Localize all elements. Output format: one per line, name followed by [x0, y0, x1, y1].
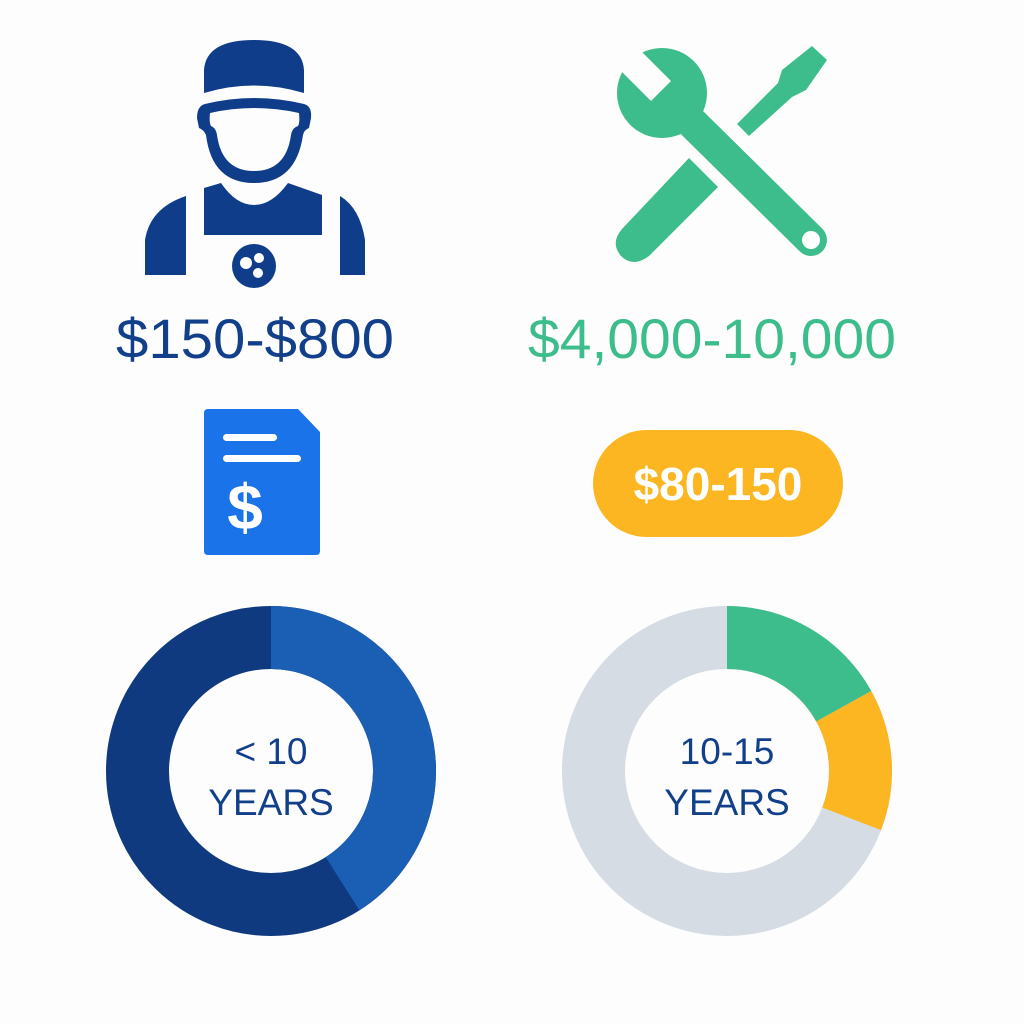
donut chart: under 10 years: < 10	[234, 731, 308, 772]
badge: maintenance price	[593, 430, 843, 537]
icon: wrench and screwdriver	[609, 39, 827, 262]
price: replacement: $4,000-10,000	[528, 307, 896, 370]
icon: invoice document: $	[227, 471, 263, 543]
donut chart: under 10 years	[138, 606, 436, 910]
icon: invoice document	[204, 409, 320, 555]
donut chart: 10-15 years	[594, 606, 892, 904]
icon: technician	[145, 40, 365, 288]
price: technician: $150-$800	[116, 307, 394, 370]
badge: maintenance price: $80-150	[634, 458, 802, 510]
donut chart: under 10 years: YEARS	[208, 782, 334, 823]
donut chart: 10-15 years: 10-15	[680, 731, 774, 772]
donut chart: 10-15 years: YEARS	[664, 782, 790, 823]
